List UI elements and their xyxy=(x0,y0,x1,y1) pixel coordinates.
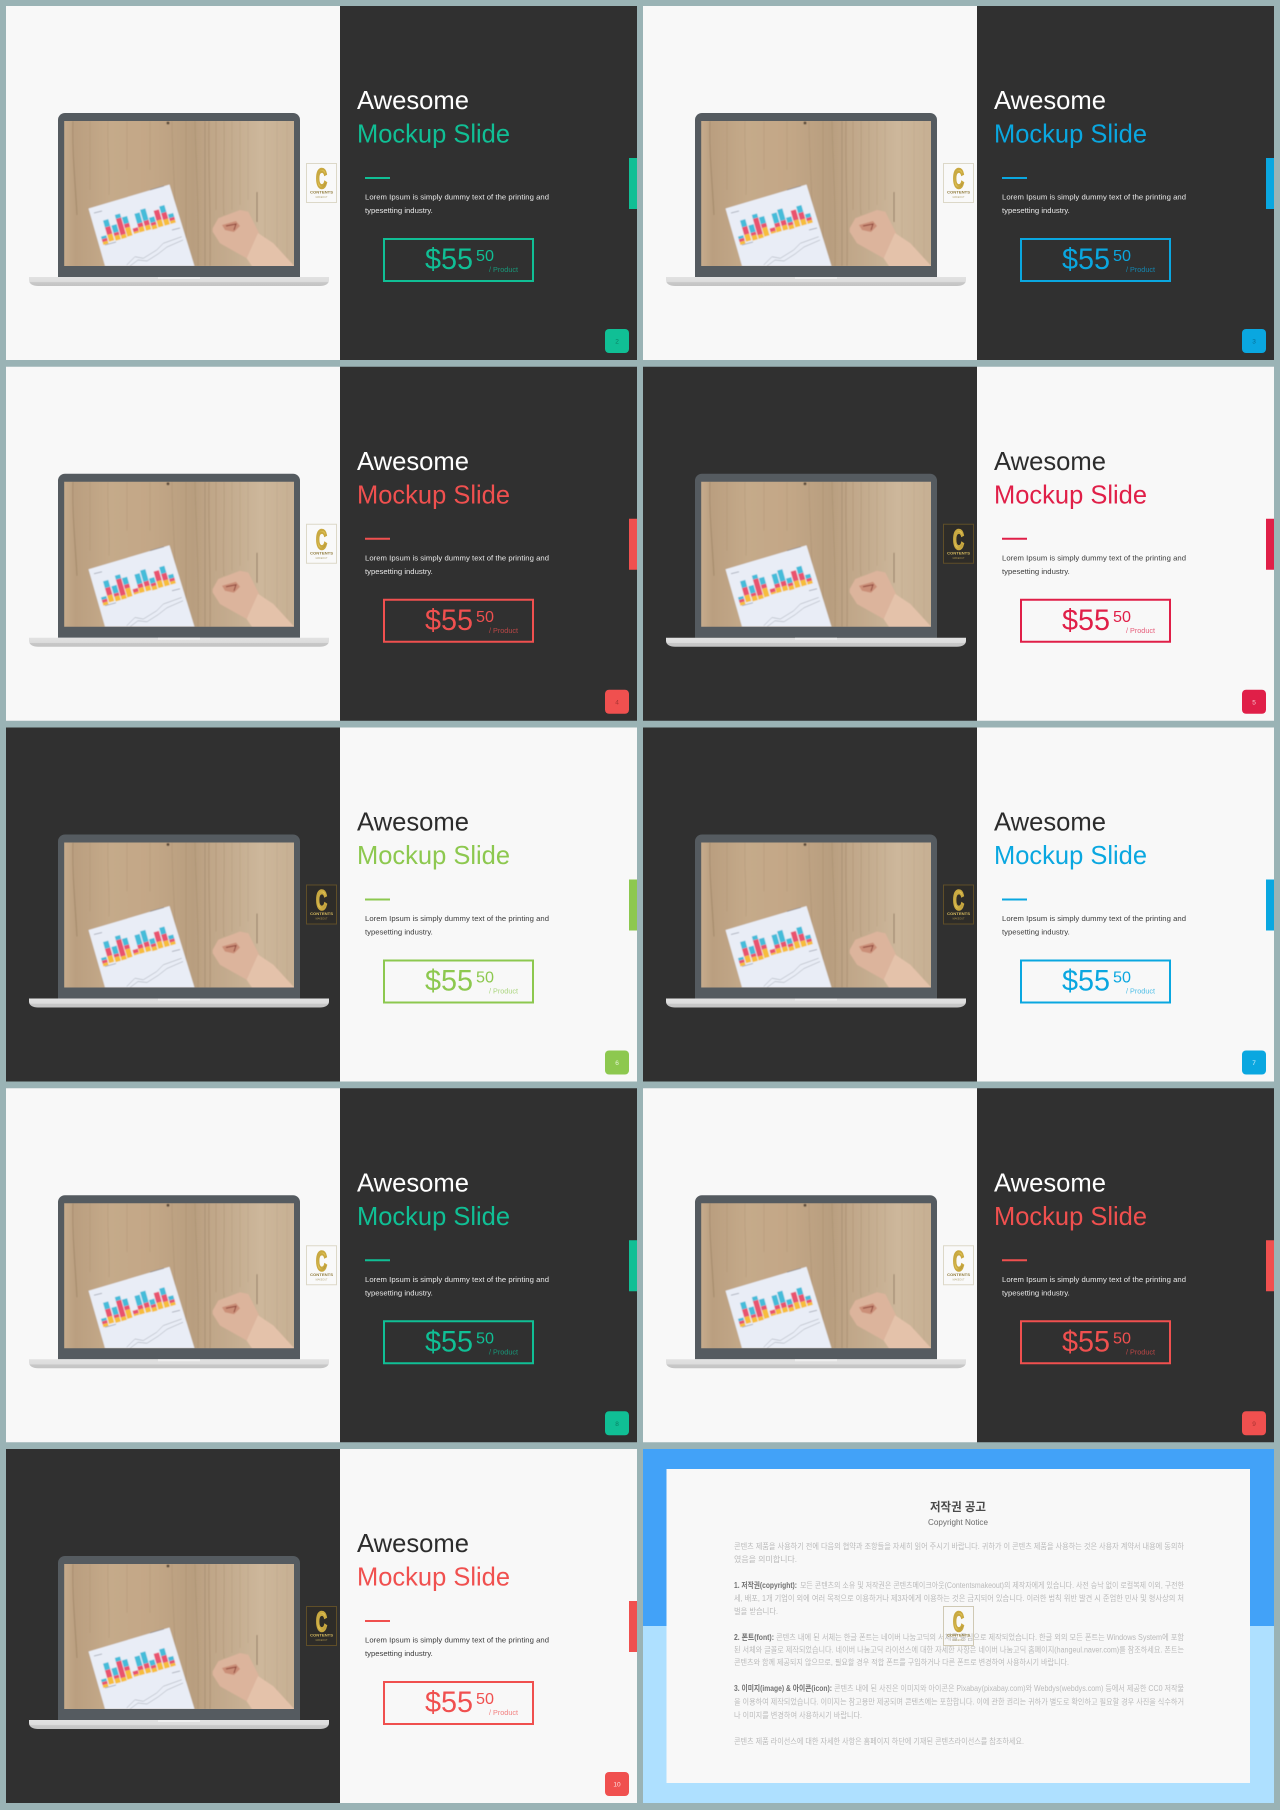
accent dash xyxy=(365,1620,390,1622)
section 3 image and icon: 콘텐츠 내에 된 사진은 이미지와 아이콘은 Pixabay(pixabay.com)와 Webdys(webdys.com) 등에서 제공한 CC0 저작물 xyxy=(834,1683,1184,1693)
logo badge xyxy=(306,1245,336,1285)
side tab xyxy=(629,1601,637,1652)
left panel xyxy=(6,6,340,360)
page number badge: 6 xyxy=(615,1060,619,1067)
logo badge xyxy=(306,1606,336,1646)
left panel xyxy=(643,6,977,360)
logo badge: CONTENTS xyxy=(947,550,970,555)
white notice panel xyxy=(666,1469,1250,1783)
side tab xyxy=(629,880,637,930)
logo badge: C xyxy=(953,884,964,916)
logo badge: C xyxy=(953,1606,964,1637)
page number badge: 7 xyxy=(1252,1060,1256,1067)
section 3 image and icon: 3. 이미지(image) & 아이콘(icon): xyxy=(734,1683,832,1693)
price box: 50 xyxy=(1113,609,1131,626)
price box: / Product xyxy=(1126,265,1156,274)
logo badge: MAKEOUT xyxy=(316,196,328,199)
price box xyxy=(1021,600,1170,642)
description: Lorem Ipsum is simply dummy text of the printing and xyxy=(365,553,549,562)
page number badge xyxy=(1242,1050,1266,1074)
laptop mockup with photo xyxy=(666,474,966,647)
logo badge: MAKEOUT xyxy=(316,1278,328,1281)
intro paragraph xyxy=(734,1541,1185,1564)
slide 5: crimson on light xyxy=(643,367,1274,721)
price box: / Product xyxy=(489,626,519,635)
description: Lorem Ipsum is simply dummy text of the printing and xyxy=(1002,192,1186,202)
section 1 copyright: 1. 저작권(copyright): xyxy=(734,1580,797,1590)
title: Mockup Slide xyxy=(357,479,510,509)
notice subheading: Copyright Notice xyxy=(928,1517,988,1527)
price box xyxy=(1021,960,1170,1002)
title: Awesome xyxy=(357,1528,469,1558)
price box: 50 xyxy=(476,609,494,626)
logo badge: CONTENTS xyxy=(310,911,333,916)
description: typesetting industry. xyxy=(1002,1288,1070,1297)
logo badge: C xyxy=(953,163,964,194)
description: typesetting industry. xyxy=(1002,206,1070,215)
price box: $55 xyxy=(1062,604,1110,637)
logo badge: MAKEOUT xyxy=(316,1639,328,1642)
price box xyxy=(384,960,533,1002)
logo badge: C xyxy=(316,1606,327,1637)
description xyxy=(1002,1275,1186,1297)
right panel xyxy=(340,1088,637,1442)
title: Awesome xyxy=(357,1167,469,1197)
section 1 copyright xyxy=(734,1580,1185,1616)
price box: $55 xyxy=(425,964,473,998)
accent dash xyxy=(1002,1259,1027,1261)
description: Lorem Ipsum is simply dummy text of the printing and xyxy=(365,914,549,923)
description: typesetting industry. xyxy=(365,928,433,937)
description: Lorem Ipsum is simply dummy text of the printing and xyxy=(365,1636,549,1644)
logo badge: CONTENTS xyxy=(947,190,970,194)
page number badge xyxy=(1242,690,1266,714)
right panel xyxy=(977,1088,1274,1442)
section 2 font: 2. 폰트(font): xyxy=(734,1633,774,1642)
background lower light blue xyxy=(643,1626,1274,1803)
logo badge xyxy=(306,524,336,563)
price box: / Product xyxy=(489,265,519,274)
title: Awesome xyxy=(357,446,469,476)
title: Awesome xyxy=(994,806,1106,836)
page number badge xyxy=(605,690,629,714)
side tab xyxy=(629,519,637,570)
right panel xyxy=(977,6,1274,360)
logo badge: MAKEOUT xyxy=(953,1278,965,1281)
side tab xyxy=(1266,519,1274,570)
description xyxy=(365,914,549,937)
title xyxy=(994,85,1147,148)
slide 2: teal on dark xyxy=(6,6,637,360)
title: Awesome xyxy=(994,1167,1106,1197)
title xyxy=(357,85,510,148)
laptop mockup with photo xyxy=(29,1195,329,1368)
price box: 50 xyxy=(1113,1330,1131,1347)
page number badge: 9 xyxy=(1252,1421,1256,1428)
page number badge xyxy=(605,1772,629,1796)
laptop mockup with photo xyxy=(29,474,329,647)
accent dash xyxy=(365,538,390,540)
accent dash xyxy=(1002,177,1027,179)
logo badge: MAKEOUT xyxy=(953,557,965,560)
description: typesetting industry. xyxy=(365,1649,433,1658)
logo badge xyxy=(944,163,974,202)
laptop mockup with photo xyxy=(666,1195,966,1368)
logo badge: C xyxy=(316,884,327,916)
logo badge: MAKEOUT xyxy=(953,196,965,199)
description: typesetting industry. xyxy=(365,567,433,576)
price box: $55 xyxy=(425,1325,473,1358)
logo badge: CONTENTS xyxy=(947,1632,970,1638)
accent dash xyxy=(365,1259,390,1261)
logo badge: MAKEOUT xyxy=(953,918,965,920)
left panel xyxy=(643,1088,977,1442)
logo badge xyxy=(944,1606,974,1646)
description: typesetting industry. xyxy=(365,1288,433,1297)
logo badge xyxy=(306,884,336,924)
left panel xyxy=(6,367,340,721)
right panel xyxy=(340,1449,637,1803)
left panel xyxy=(6,1088,340,1442)
section 3 image and icon xyxy=(734,1683,1184,1720)
slide 6: green on light xyxy=(6,728,637,1082)
logo badge: CONTENTS xyxy=(310,190,333,194)
description: Lorem Ipsum is simply dummy text of the printing and xyxy=(1002,1275,1186,1284)
description xyxy=(1002,914,1186,937)
logo badge: C xyxy=(316,524,327,555)
logo badge: CONTENTS xyxy=(310,1272,333,1277)
description: Lorem Ipsum is simply dummy text of the printing and xyxy=(1002,914,1186,923)
section 2 font: 된 서체와 글꼴로 제작되었습니다. 네이버 나눔고딕 라이선스에 대한 자세한 사항은 네이버 나눔고딕 홈페이지(hangeul.naver.com)를 참조하세요. 폰트는 xyxy=(734,1645,1184,1655)
title: Mockup Slide xyxy=(994,479,1147,509)
left panel xyxy=(6,1449,340,1803)
description: typesetting industry. xyxy=(1002,928,1070,937)
description: Lorem Ipsum is simply dummy text of the printing and xyxy=(1002,553,1186,562)
description xyxy=(365,1636,549,1658)
section 2 font: 콘텐츠 내에 된 서체는 한글 폰트는 네이버 나눔고딕의 서체를 중심으로 제작되었습니다. 한글 외의 모든 폰트는 Windows System에 포함 xyxy=(776,1632,1185,1642)
page number badge xyxy=(1242,1411,1266,1435)
description: Lorem Ipsum is simply dummy text of the printing and xyxy=(365,1275,549,1284)
license note: 콘텐츠 제품 라이선스에 대한 자세한 사항은 홈페이지 하단에 기재된 콘텐츠라이선스를 참조하세요. xyxy=(734,1736,1024,1746)
description xyxy=(365,553,549,576)
title xyxy=(357,1528,510,1592)
logo badge xyxy=(944,1245,974,1285)
title xyxy=(357,446,510,509)
price box xyxy=(384,239,533,281)
title: Awesome xyxy=(994,85,1106,115)
background upper blue xyxy=(643,1449,1274,1626)
side tab xyxy=(629,1240,637,1291)
notice heading: 저작권 공고 xyxy=(930,1499,986,1514)
right panel xyxy=(340,367,637,721)
title: Mockup Slide xyxy=(357,118,510,148)
right panel xyxy=(977,367,1274,721)
price box: / Product xyxy=(489,986,519,996)
section 2 font: 콘텐츠와 함께 제공되지 않으므로, 필요할 경우 적합 폰트를 구입하거나 다른 폰트로 변경하여 사용하시기 바랍니다. xyxy=(734,1657,1069,1667)
price box xyxy=(1021,1321,1170,1363)
right panel xyxy=(340,728,637,1082)
section 2 font xyxy=(734,1632,1185,1667)
page number badge xyxy=(605,329,629,353)
section 3 image and icon: 을 이용하여 제작되었습니다. 이미지는 참고용만 제공되며 콘텐츠에는 포함합니다. 이에 관한 권리는 귀하가 별도로 확인하고 필요할 경우 사진을 식수하거 xyxy=(734,1697,1184,1707)
logo badge: CONTENTS xyxy=(310,550,333,555)
page number badge: 5 xyxy=(1252,699,1256,706)
laptop mockup with photo xyxy=(29,1556,329,1729)
title: Mockup Slide xyxy=(994,840,1147,870)
logo badge: MAKEOUT xyxy=(953,1639,965,1642)
slide 3: blue on dark xyxy=(643,6,1274,360)
title: Mockup Slide xyxy=(357,840,510,870)
page number badge: 2 xyxy=(615,338,619,346)
intro paragraph: 였음을 의미합니다. xyxy=(734,1554,797,1564)
logo badge xyxy=(306,163,336,202)
description: Lorem Ipsum is simply dummy text of the printing and xyxy=(365,192,549,202)
price box: / Product xyxy=(489,1708,519,1717)
logo badge: MAKEOUT xyxy=(316,557,328,560)
laptop mockup with photo xyxy=(666,113,966,286)
slide 11: copyright notice xyxy=(643,1449,1274,1803)
side tab xyxy=(1266,158,1274,209)
logo badge: MAKEOUT xyxy=(316,918,328,920)
price box: $55 xyxy=(425,604,473,637)
price box: 50 xyxy=(476,1330,494,1347)
section 1 copyright: 모든 콘텐츠의 소유 및 저작권은 콘텐츠메이크아웃(Contentsmakeout)의 제작자에게 있습니다. 사전 승낙 없이 로컬복제 이외, 구전한 xyxy=(800,1580,1185,1590)
section 1 copyright: 벌을 받습니다. xyxy=(734,1606,778,1616)
title: Awesome xyxy=(357,85,469,115)
price box xyxy=(384,1321,533,1363)
page number badge: 4 xyxy=(615,699,619,706)
side tab xyxy=(1266,880,1274,930)
price box: / Product xyxy=(489,1347,519,1356)
price box: $55 xyxy=(1062,964,1110,998)
title xyxy=(357,1167,510,1231)
title: Mockup Slide xyxy=(357,1201,510,1231)
price box: / Product xyxy=(1126,1347,1156,1356)
price box: 50 xyxy=(476,1691,494,1708)
right panel xyxy=(977,728,1274,1082)
accent dash xyxy=(365,898,390,900)
side tab xyxy=(629,158,637,209)
price box: 50 xyxy=(476,248,494,265)
left panel xyxy=(6,728,340,1082)
price box: 50 xyxy=(1113,248,1131,265)
intro paragraph: 콘텐츠 제품을 사용하기 전에 다음의 협약과 조항들을 자세히 읽어 주시기 바랍니다. 귀하가 이 콘텐츠 제품을 사용하는 것은 사용자 계약서 내용에 동의하 xyxy=(734,1541,1185,1551)
price box: $55 xyxy=(425,1686,473,1719)
section 1 copyright: 세, 배포, 1개 기업이 외에 여러 목적으로 이용하거나 제3자에게 이용하는 것은 금지되어 있습니다. 이러한 법칙 위반 발견 시 준엄한 민사 및 형사상의 처 xyxy=(734,1593,1184,1603)
title: Awesome xyxy=(357,806,469,836)
side tab xyxy=(1266,1240,1274,1291)
description: typesetting industry. xyxy=(1002,567,1070,576)
logo badge: CONTENTS xyxy=(310,1632,333,1638)
price box xyxy=(384,1682,533,1724)
accent dash xyxy=(365,177,390,179)
price box xyxy=(384,600,533,642)
logo badge: CONTENTS xyxy=(947,1272,970,1277)
description xyxy=(365,1275,549,1297)
price box: $55 xyxy=(1062,243,1110,276)
slide 4: red on dark xyxy=(6,367,637,721)
logo badge: C xyxy=(316,163,327,194)
page number badge xyxy=(605,1411,629,1435)
left panel xyxy=(643,367,977,721)
logo badge: CONTENTS xyxy=(947,911,970,916)
logo badge: C xyxy=(953,1245,964,1276)
logo badge: C xyxy=(316,1245,327,1276)
page number badge: 8 xyxy=(615,1421,619,1428)
title xyxy=(994,1167,1147,1231)
price box: / Product xyxy=(1126,986,1156,996)
slide 7: blue on light xyxy=(643,728,1274,1082)
title: Awesome xyxy=(994,446,1106,476)
page number badge: 10 xyxy=(613,1782,621,1788)
title xyxy=(994,806,1147,870)
price box: 50 xyxy=(1113,970,1131,986)
price box: $55 xyxy=(1062,1325,1110,1358)
laptop mockup with photo xyxy=(29,113,329,286)
section 3 image and icon: 나 이미지를 변경하여 사용하시기 바랍니다. xyxy=(734,1710,862,1720)
title: Mockup Slide xyxy=(994,118,1147,148)
price box xyxy=(1021,239,1170,281)
description: typesetting industry. xyxy=(365,206,433,215)
page number badge: 3 xyxy=(1252,338,1256,346)
price box: $55 xyxy=(425,243,473,276)
description xyxy=(1002,553,1186,576)
accent dash xyxy=(1002,538,1027,540)
logo badge: C xyxy=(953,524,964,555)
slide 9: red on dark xyxy=(643,1088,1274,1442)
slide 10: red on light xyxy=(6,1449,637,1803)
right panel xyxy=(340,6,637,360)
price box: / Product xyxy=(1126,626,1156,635)
price box: 50 xyxy=(476,970,494,986)
title: Mockup Slide xyxy=(357,1562,510,1592)
logo badge xyxy=(944,524,974,563)
page number badge xyxy=(1242,329,1266,353)
title xyxy=(357,806,510,870)
title: Mockup Slide xyxy=(994,1201,1147,1231)
title xyxy=(994,446,1147,509)
laptop mockup with photo xyxy=(29,834,329,1008)
laptop mockup with photo xyxy=(666,834,966,1008)
logo badge xyxy=(944,884,974,924)
description xyxy=(1002,192,1186,215)
slide 8: teal on dark xyxy=(6,1088,637,1442)
description xyxy=(365,192,549,215)
page number badge xyxy=(605,1050,629,1074)
accent dash xyxy=(1002,898,1027,900)
left panel xyxy=(643,728,977,1082)
